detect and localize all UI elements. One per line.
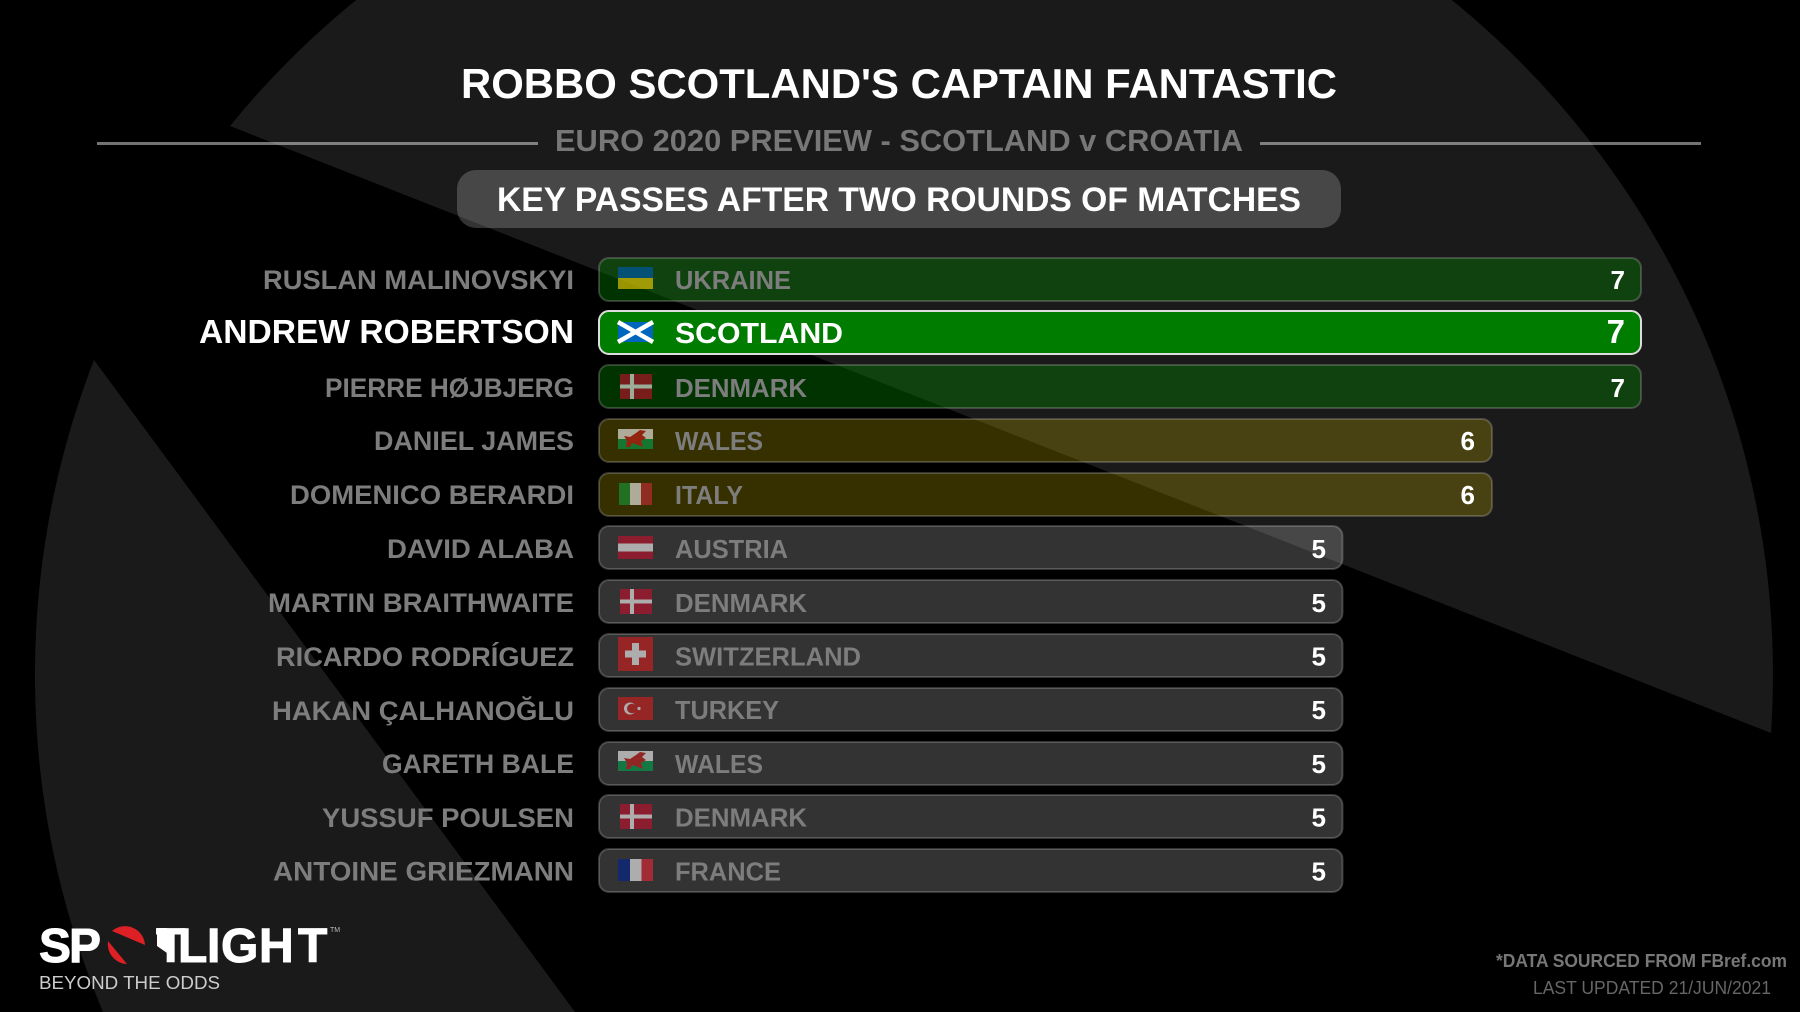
chart heading pill <box>457 170 1341 228</box>
row: Andrew Robertson (highlighted): SCOTLAND <box>675 318 843 350</box>
row: Yussuf Poulsen: DENMARK <box>675 802 807 832</box>
logo: Spotlight: SPOTLIGHT <box>39 920 327 973</box>
row: Andrew Robertson (highlighted) <box>199 311 1641 354</box>
row: David Alaba <box>387 526 1342 569</box>
subtitle with rules: EURO 2020 PREVIEW - SCOTLAND v CROATIA <box>555 123 1243 158</box>
subtitle with rules <box>97 123 1701 158</box>
row: Antoine Griezmann: 5 <box>1312 856 1326 886</box>
row: David Alaba: 5 <box>1312 534 1326 564</box>
row: Domenico Berardi: ITALY <box>675 480 743 510</box>
row: Ruslan Malinovskyi: UKRAINE <box>675 265 791 295</box>
row: Gareth Bale: 5 <box>1312 749 1326 779</box>
row: Domenico Berardi <box>290 473 1492 516</box>
row: Daniel James: 6 <box>1461 426 1475 456</box>
row: Andrew Robertson (highlighted): 7 <box>1607 313 1625 350</box>
row: Hakan Çalhanoğlu: HAKAN ÇALHANOĞLU <box>272 695 574 726</box>
source note: LAST UPDATED 21/JUN/2021 <box>1533 978 1771 998</box>
row: Domenico Berardi: 6 <box>1461 480 1475 510</box>
logo: Spotlight: BEYOND THE ODDS <box>39 973 220 993</box>
row: Hakan Çalhanoğlu: TURKEY <box>675 695 779 725</box>
row: Ricardo Rodríguez: SWITZERLAND <box>675 642 861 672</box>
row: Ricardo Rodríguez <box>276 634 1342 677</box>
row: Antoine Griezmann: ANTOINE GRIEZMANN <box>273 856 574 886</box>
row: Martin Braithwaite: MARTIN BRAITHWAITE <box>268 588 574 618</box>
row: Daniel James <box>374 419 1492 462</box>
row: Daniel James: DANIEL JAMES <box>374 426 574 456</box>
bar chart: key passes <box>199 258 1641 892</box>
row: Gareth Bale: WALES <box>675 749 763 779</box>
row: David Alaba: AUSTRIA <box>675 534 788 564</box>
row: Daniel James: WALES <box>675 426 763 456</box>
row: Yussuf Poulsen <box>322 795 1342 838</box>
row: Antoine Griezmann: FRANCE <box>675 856 781 886</box>
row: Pierre Højbjerg: 7 <box>1611 373 1625 403</box>
row: Ricardo Rodríguez: 5 <box>1312 642 1326 672</box>
chart heading pill: KEY PASSES AFTER TWO ROUNDS OF MATCHES <box>497 181 1301 219</box>
row: Yussuf Poulsen: 5 <box>1312 802 1326 832</box>
title: ROBBO SCOTLAND'S CAPTAIN FANTASTIC <box>461 60 1337 107</box>
row: Domenico Berardi: DOMENICO BERARDI <box>290 480 574 510</box>
row: Martin Braithwaite: 5 <box>1312 588 1326 618</box>
row: Ruslan Malinovskyi: RUSLAN MALINOVSKYI <box>263 265 574 295</box>
row: Pierre Højbjerg <box>325 365 1641 408</box>
row: David Alaba: DAVID ALABA <box>387 534 574 564</box>
row: Hakan Çalhanoğlu: 5 <box>1312 695 1326 725</box>
row: Yussuf Poulsen: YUSSUF POULSEN <box>322 803 574 833</box>
row: Martin Braithwaite <box>268 580 1342 623</box>
row: Gareth Bale <box>382 742 1342 785</box>
row: Pierre Højbjerg: DENMARK <box>675 373 807 403</box>
logo: Spotlight: TM <box>330 927 340 934</box>
row: Ricardo Rodríguez: RICARDO RODRÍGUEZ <box>276 641 574 672</box>
row: Antoine Griezmann <box>273 849 1342 892</box>
row: Ruslan Malinovskyi: 7 <box>1611 265 1625 295</box>
row: Martin Braithwaite: DENMARK <box>675 588 807 618</box>
row: Gareth Bale: GARETH BALE <box>382 749 574 779</box>
row: Andrew Robertson (highlighted): ANDREW ROBERTSON <box>199 313 574 350</box>
row: Ruslan Malinovskyi <box>263 258 1641 301</box>
row: Hakan Çalhanoğlu <box>272 688 1342 731</box>
row: Pierre Højbjerg: PIERRE HØJBJERG <box>325 373 574 403</box>
source note <box>1496 951 1787 998</box>
logo: Spotlight <box>39 920 340 993</box>
source note: *DATA SOURCED FROM FBref.com <box>1496 951 1787 971</box>
